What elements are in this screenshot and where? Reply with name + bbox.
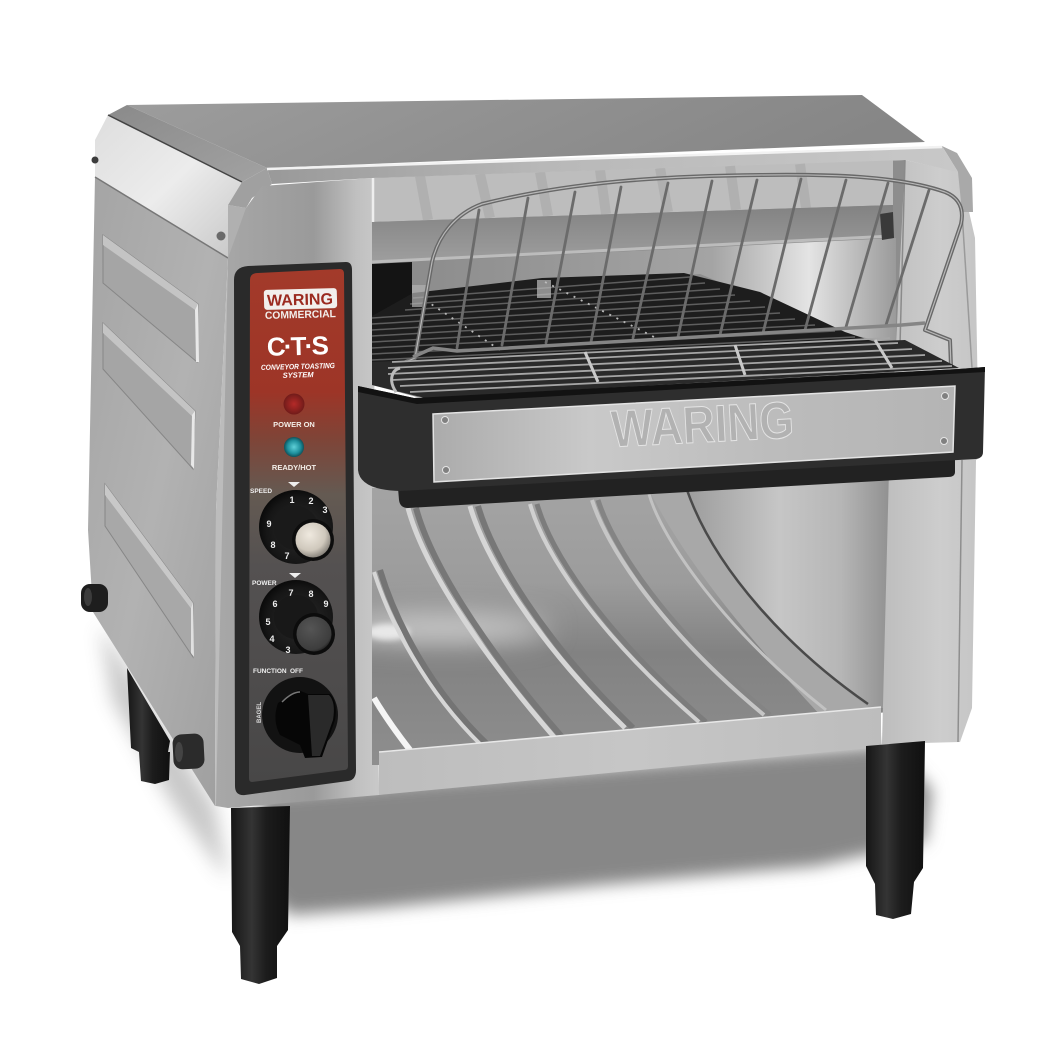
power label: POWER [252, 580, 277, 587]
basket frame rail [392, 175, 962, 392]
subtitle: CONVEYOR TOASTING [261, 361, 335, 372]
upper interior [372, 160, 896, 345]
dark side opening [372, 262, 412, 316]
function dial: BAGEL [257, 702, 263, 723]
front rack [372, 338, 959, 398]
rear left leg [127, 668, 170, 784]
CTS heading: C·T·S [266, 330, 329, 362]
basket bars [457, 179, 929, 348]
side embossed panel 3 [105, 484, 194, 657]
front plate [433, 386, 955, 482]
illustration: conveyor toaster [81, 95, 985, 984]
off label: OFF [290, 668, 303, 675]
power knob cap [293, 613, 335, 655]
power dial: 9 [323, 599, 329, 609]
speed marker [288, 482, 300, 487]
conveyor bracket [358, 367, 985, 508]
speed label: SPEED [250, 488, 272, 495]
function knob handle [275, 690, 336, 758]
side embossed panel 2 [103, 323, 195, 469]
power label: POWER ON [273, 420, 315, 429]
function dial [257, 677, 338, 758]
crumb tray [379, 707, 881, 795]
left edge reflection [366, 624, 410, 640]
power dial: 3 [285, 645, 291, 655]
power dial: 6 [272, 599, 278, 609]
basket lower rail [413, 323, 925, 357]
speed dial: 2 [308, 496, 314, 506]
subtitle [261, 361, 335, 380]
control panel bezel [234, 262, 356, 795]
logo: WARING [267, 291, 333, 310]
power LED [284, 394, 304, 414]
right column [882, 146, 979, 744]
control panel face [249, 269, 348, 782]
screw [216, 232, 226, 240]
function label: FUNCTION [253, 668, 287, 675]
side adjuster knob upper [81, 584, 108, 612]
embossed WARING logo: WARING [610, 391, 795, 459]
speed dial: 7 [284, 551, 290, 561]
power dial [259, 580, 335, 655]
top front band [267, 146, 958, 184]
side embossed panel 1 [103, 235, 199, 362]
power dial: 7 [288, 588, 294, 598]
curved ribs [374, 490, 868, 750]
smooth reflector [712, 480, 889, 708]
ready LED [284, 437, 304, 457]
wire basket [392, 175, 962, 392]
logo: COMMERCIAL [265, 308, 337, 322]
speed dial: 8 [270, 540, 276, 550]
logo [264, 288, 338, 322]
speed dial [259, 490, 334, 564]
ready label: READY/HOT [272, 463, 317, 472]
power dial: 4 [269, 634, 275, 644]
screw [92, 156, 98, 164]
left front leg [231, 806, 290, 984]
right front leg [866, 741, 925, 919]
left bevel [92, 105, 272, 262]
floor shadow [100, 625, 932, 915]
side face [88, 177, 236, 806]
left column [216, 178, 379, 808]
speed dial: 9 [266, 519, 272, 529]
top face [127, 95, 925, 168]
lower chamber [372, 480, 889, 765]
speed dial: 1 [289, 495, 295, 505]
power marker [289, 573, 301, 578]
speed knob cap [292, 519, 334, 561]
conveyor rear section [372, 273, 905, 385]
chamber reflection [330, 614, 550, 642]
power dial: 5 [265, 617, 271, 627]
interior backing [372, 160, 958, 397]
power dial: 8 [308, 589, 314, 599]
band before reflector [675, 533, 869, 712]
speed dial: 3 [322, 505, 328, 515]
subtitle: SYSTEM [283, 370, 314, 380]
side adjuster knob lower [172, 733, 205, 770]
